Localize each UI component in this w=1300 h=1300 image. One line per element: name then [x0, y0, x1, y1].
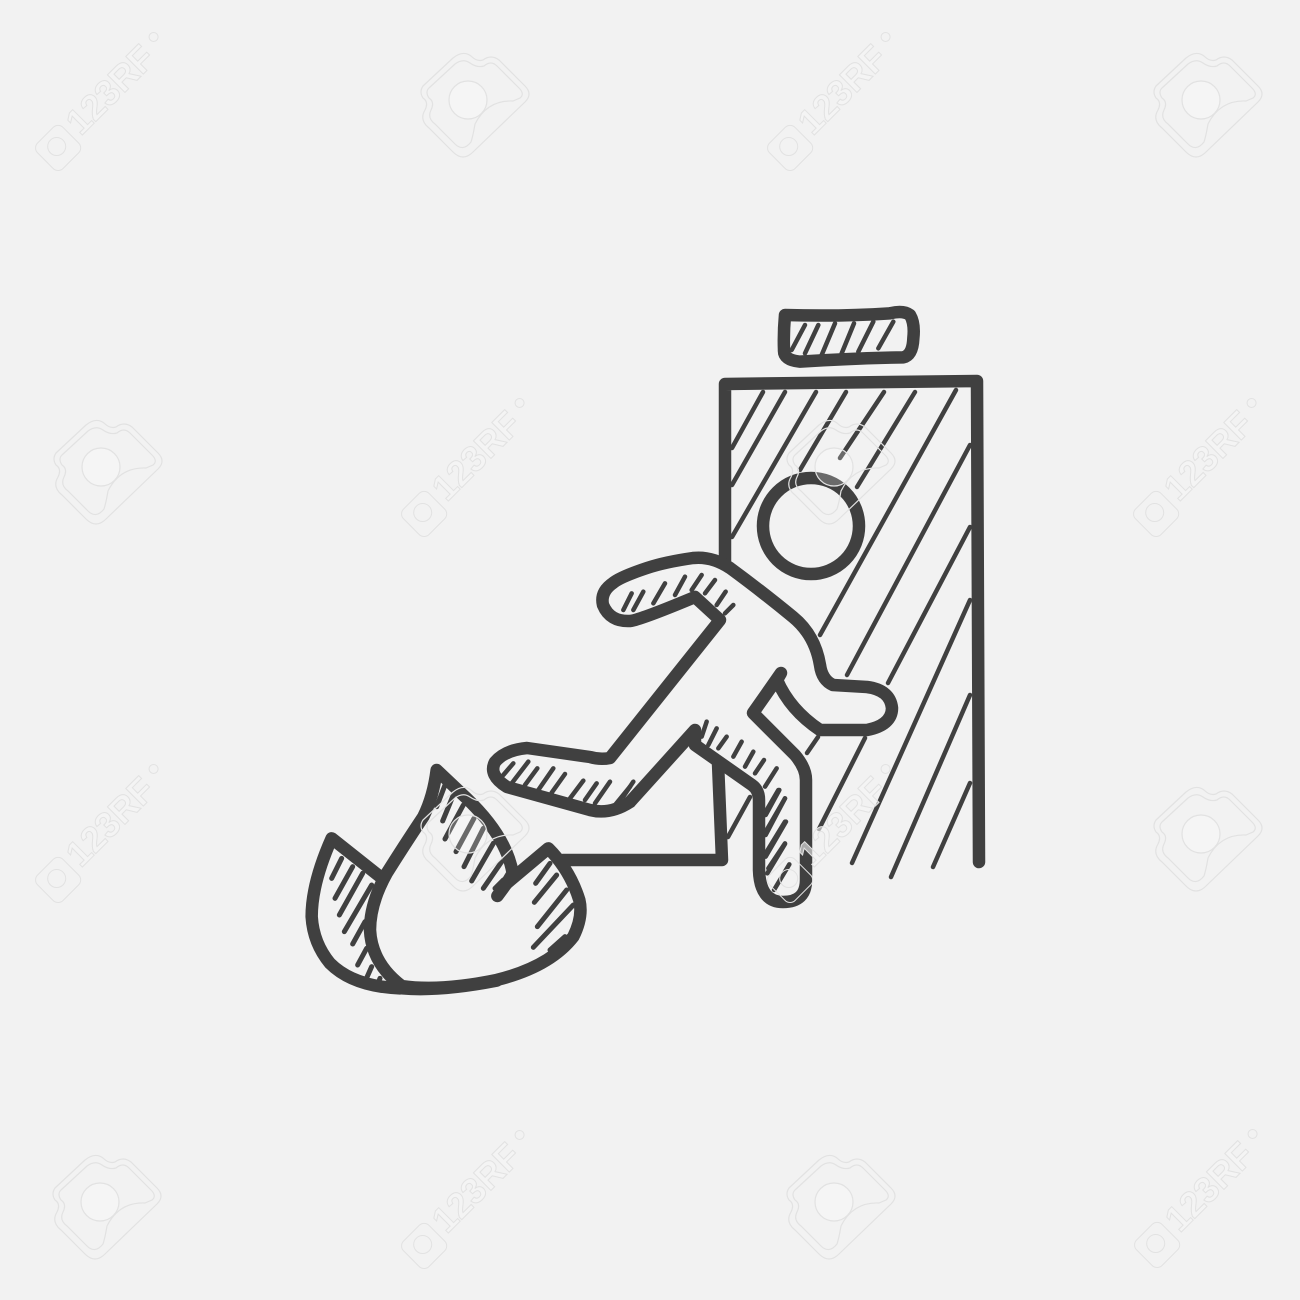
door frame — [725, 381, 979, 862]
person body — [493, 558, 892, 902]
door hatching — [728, 390, 970, 877]
icon: big flame — [370, 770, 580, 989]
ground line — [563, 763, 722, 860]
icon: small flame — [312, 838, 400, 988]
icon: exit sign — [784, 312, 914, 362]
foot hatching — [766, 790, 789, 890]
arm and upper leg hatching — [623, 575, 785, 868]
lower leg hatching — [503, 762, 630, 805]
head — [763, 478, 859, 574]
icon: running person escaping fire through exit door — [312, 312, 979, 989]
